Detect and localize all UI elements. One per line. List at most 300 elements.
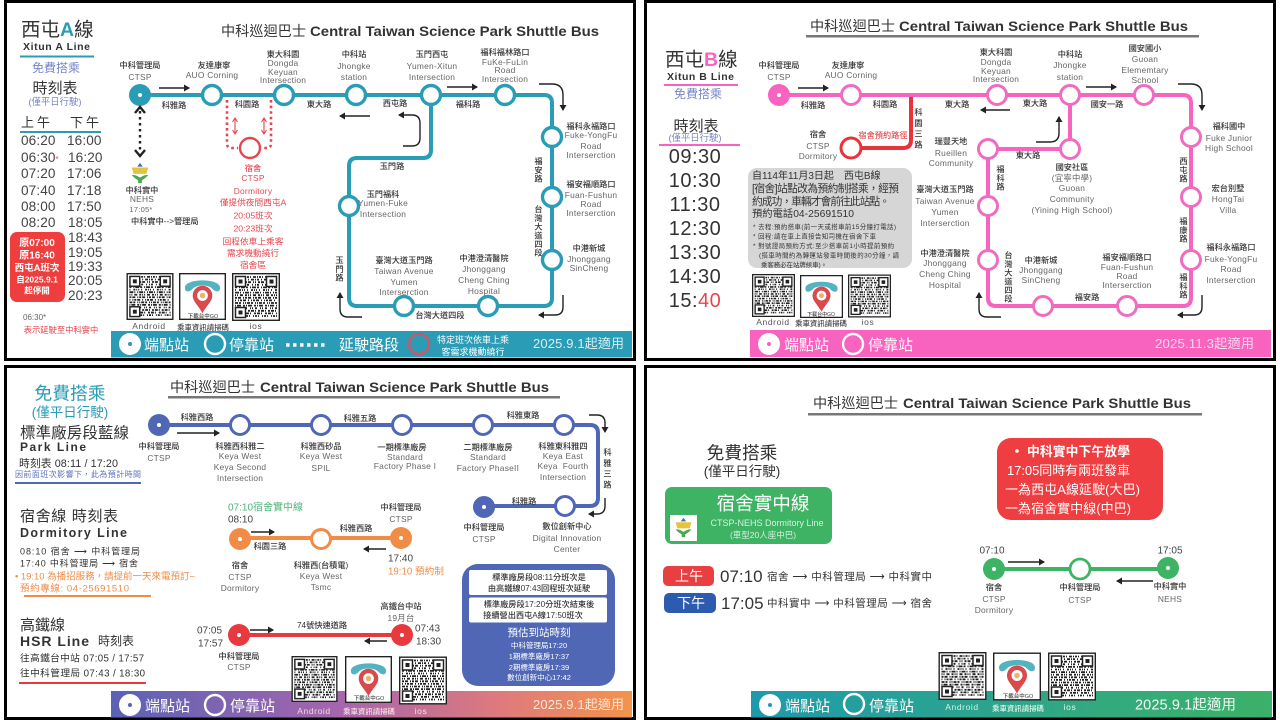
terminal and stops bbox=[202, 86, 562, 316]
free ride heading bbox=[704, 443, 780, 479]
station labels B: 臺灣大道玉門路 bbox=[916, 184, 974, 194]
station labels B: 福安福順路口 bbox=[1102, 252, 1152, 262]
timetable: 17:18 bbox=[67, 183, 102, 198]
QR codes A: Android bbox=[132, 321, 166, 331]
notice: discontinued runs: 原07:00 bbox=[19, 237, 55, 249]
QR codes B bbox=[753, 275, 890, 328]
station labels B: 東大科園 bbox=[980, 47, 1012, 57]
Park line labels: 科雅東科雅四 bbox=[538, 441, 588, 451]
route: HSR line: 18:30 bbox=[416, 636, 441, 648]
station labels A: 中科站 bbox=[342, 49, 366, 59]
Park line info: Park Line bbox=[20, 440, 86, 454]
timetable: 時刻表 bbox=[673, 118, 719, 135]
title bbox=[806, 18, 1199, 38]
route line B bbox=[768, 84, 1200, 316]
QR codes A: ios bbox=[250, 321, 262, 331]
road names B: 福安路 bbox=[1075, 292, 1100, 302]
free ride heading: 免費搭乘 bbox=[34, 384, 106, 404]
Park line labels: 數位創新中心 bbox=[542, 521, 592, 531]
station labels B: 宿舍預約路徑 bbox=[858, 130, 908, 140]
station labels B: 中港澄清醫院 bbox=[920, 248, 970, 258]
Park line labels: CTSP bbox=[472, 534, 496, 544]
panel: Dormitory NEHS line bbox=[646, 366, 1274, 718]
route: Park line bbox=[148, 414, 598, 518]
legend bar C: 端點站 bbox=[145, 698, 190, 715]
station labels B: Hospital bbox=[929, 280, 961, 290]
timetable: 09:30 bbox=[669, 146, 721, 168]
notice: discontinued runs: 起停開 bbox=[24, 286, 50, 296]
station labels B: Road bbox=[1116, 271, 1138, 281]
QR codes B: 下載台中GO bbox=[807, 311, 835, 318]
timetable: 06:20 bbox=[21, 133, 56, 148]
station labels B: Dongda bbox=[981, 57, 1012, 67]
station labels A: 福安福順路口 bbox=[566, 179, 616, 189]
station labels B: Jhonggang bbox=[1019, 265, 1063, 275]
QR codes B: ios bbox=[862, 317, 874, 327]
title: 中科巡迴巴士 bbox=[810, 18, 895, 34]
Park line labels: 科雅西科雅二 bbox=[215, 441, 265, 451]
route: HSR line: 07:05 bbox=[197, 626, 222, 636]
station labels A: Hospital bbox=[468, 286, 500, 296]
Park line labels: SPIL bbox=[311, 463, 331, 473]
timetable: 20:05 bbox=[68, 273, 103, 288]
station labels B: 友達康寧 bbox=[832, 60, 864, 70]
station labels B: Guoan bbox=[1059, 183, 1085, 193]
notice: reservation: 乘客務必在站牌候車)。 bbox=[761, 260, 827, 269]
legend bar A: 端點站 bbox=[144, 337, 189, 354]
station labels B: CTSP bbox=[806, 141, 830, 151]
Dormitory line info: 08:10 宿舍 ⟶ 中科管理局 bbox=[20, 546, 140, 556]
dormitory branch: Dormitory bbox=[234, 186, 273, 196]
legend bar B bbox=[750, 330, 1271, 357]
QR codes B: 乘車資訊請掃碼 bbox=[795, 319, 847, 328]
notice: reservation: * 去程:預約搭車(前一天或搭車前15分鐘打電話) bbox=[753, 222, 896, 231]
Park line info: 時刻表 08:11 / 17:20 bbox=[19, 456, 118, 470]
timetable: 06:30* bbox=[21, 150, 59, 165]
Park line labels: Center bbox=[554, 544, 580, 554]
HSR line info: 往中科管理局 07:43 / 18:30 bbox=[20, 666, 146, 680]
station labels A: Jhonggang bbox=[567, 254, 611, 264]
station labels B: station bbox=[1057, 72, 1083, 82]
callout: after-school departures: 17:05同時有兩班發車 bbox=[1007, 463, 1130, 478]
Park line labels: 科雅路 bbox=[512, 496, 537, 506]
road names A: 東大路 bbox=[307, 99, 332, 109]
QR codes C: Android bbox=[297, 706, 331, 716]
station labels A: 中港新城 bbox=[573, 243, 605, 253]
station labels B: Fuan-Fushun bbox=[1101, 262, 1153, 272]
Dormitory line info: 17:40 中科管理局 ⟶ 宿舍 bbox=[20, 558, 138, 568]
Park line labels: Intersection bbox=[540, 472, 586, 482]
route: HSR line: 19月台 bbox=[387, 613, 415, 623]
title: Central Taiwan Science Park Shuttle Bus bbox=[903, 395, 1191, 411]
callout: arrival times: 1期標準廠房17:37 bbox=[509, 651, 569, 661]
title: Central Taiwan Science Park Shuttle Bus bbox=[310, 23, 599, 39]
Park line labels: Keya West bbox=[219, 451, 262, 461]
station labels B: 國安社區 bbox=[1056, 162, 1088, 172]
station labels B: Dormitory bbox=[799, 151, 838, 161]
extension to NEHS: NEHS bbox=[130, 194, 154, 204]
station labels A: Interserction bbox=[379, 287, 429, 297]
station labels A: 中科管理局 bbox=[120, 60, 160, 70]
panel: Xitun B Line bbox=[646, 2, 1274, 360]
station labels B: Guoan bbox=[1132, 54, 1158, 64]
route: Dormitory line: 中科管理局 bbox=[381, 502, 421, 512]
route: Dormitory line: CTSP bbox=[228, 572, 252, 582]
road names A: 福安路 bbox=[534, 156, 543, 184]
road names B: 科園三路 bbox=[914, 107, 923, 151]
QR codes C: ios bbox=[415, 706, 427, 716]
station labels A: Fuan-Fushun bbox=[565, 190, 617, 200]
timetable: 下午 bbox=[70, 115, 102, 130]
timetable: 上午 bbox=[21, 115, 53, 130]
panel: Park, Dormitory and HSR lines bbox=[6, 366, 634, 718]
station labels B: Keyuan bbox=[981, 66, 1011, 76]
Park line labels: Keya Second bbox=[214, 462, 266, 472]
road names B: 西屯路 bbox=[1178, 157, 1188, 184]
free ride heading bbox=[32, 384, 108, 420]
legend bar D: 端點站 bbox=[785, 698, 830, 715]
station labels A: Yumen-Fuke bbox=[358, 198, 408, 208]
station labels A: Yumen bbox=[390, 277, 418, 287]
QR codes D: 下載台中GO bbox=[1003, 692, 1034, 700]
dormitory reservation branch bbox=[852, 97, 911, 148]
station labels B: Community bbox=[1050, 194, 1095, 204]
station labels A: Intersection bbox=[260, 75, 306, 85]
timetable: 14:30 bbox=[669, 266, 721, 288]
timetable: 19:33 bbox=[68, 259, 103, 274]
road names A: 玉門路 bbox=[380, 161, 405, 171]
title: Central Taiwan Science Park Shuttle Bus bbox=[260, 379, 549, 395]
schedule rows: 07:10 bbox=[720, 567, 763, 586]
notice: reservation: 約成功，車輛才會前往此站點。 bbox=[752, 195, 890, 208]
QR codes A bbox=[127, 274, 279, 332]
road names B bbox=[801, 98, 1188, 304]
legend bar A: 延駛路段 bbox=[339, 337, 399, 354]
legend bar B: 2025.11.3起適用 bbox=[1155, 335, 1254, 351]
station labels B: Yumen bbox=[931, 207, 959, 217]
Park line labels: 科雅西路 bbox=[181, 412, 214, 422]
QR codes A: 下載台中GO bbox=[188, 312, 219, 320]
route: Dormitory line bbox=[221, 500, 444, 593]
station labels A: 福科永福路口 bbox=[566, 121, 616, 131]
HSR line info: 往高鐵台中站 07:05 / 17:57 bbox=[20, 652, 144, 664]
Dormitory line info bbox=[15, 508, 195, 597]
route: NEHS line: 宿舍 bbox=[986, 582, 1002, 592]
station labels A: Intersection bbox=[482, 74, 528, 84]
route: HSR line: 74號快速道路 bbox=[297, 620, 348, 630]
route: Dormitory line: Tsmc bbox=[311, 582, 331, 592]
station labels B: 宿舍 bbox=[810, 129, 826, 139]
station labels B: Interserction bbox=[1102, 280, 1152, 290]
Park line labels: Digital Innovation bbox=[533, 533, 601, 543]
station labels A: Cheng Ching bbox=[458, 275, 510, 285]
dormitory branch: 僅提供夜間西屯A bbox=[220, 196, 287, 208]
notice: reservation: * 對號證局預約方式:至少搭車前1小時提前預約 bbox=[753, 241, 894, 250]
QR codes D: Android bbox=[945, 702, 979, 712]
station labels A: Jhongke bbox=[337, 61, 371, 71]
station labels B: Road bbox=[1220, 264, 1242, 274]
HSR line info: HSR Line bbox=[20, 633, 89, 649]
station labels B: 國安國小 bbox=[1129, 43, 1162, 53]
callout: arrival times: 預估到站時刻 bbox=[508, 626, 570, 639]
dormitory branch: CTSP bbox=[241, 173, 265, 183]
road names A: 科雅路 bbox=[162, 100, 187, 110]
road names B: 福康路 bbox=[1178, 216, 1188, 244]
timetable: 08:20 bbox=[21, 215, 56, 230]
notice: discontinued runs bbox=[10, 232, 65, 302]
callout: arrival times: 接續營出西屯A線17:50班次 bbox=[483, 610, 583, 620]
station labels B: Community bbox=[929, 158, 974, 168]
Park line labels: Keya Fourth bbox=[538, 461, 589, 471]
QR codes C: 下載台中GO bbox=[354, 694, 385, 702]
Dormitory line info: 宿舍線 時刻表 bbox=[20, 508, 118, 525]
timetable: 19:05 bbox=[68, 245, 103, 260]
station labels B: (Yining High School) bbox=[1031, 205, 1113, 215]
callout: arrival times: 由高鐵線07:43回程班次延駛 bbox=[488, 583, 590, 593]
road names A: 福科路 bbox=[456, 99, 481, 109]
Park line labels: 科雅三路 bbox=[602, 447, 612, 491]
station labels A: AUO Corning bbox=[186, 70, 238, 80]
schedule rows: 下午 bbox=[677, 595, 705, 611]
road names A: 台灣大道四段 bbox=[534, 204, 543, 258]
timetable: 08:00 bbox=[21, 199, 56, 214]
timetable: 16:00 bbox=[67, 133, 102, 148]
callout: after-school departures: 中科實中下午放學 bbox=[1027, 444, 1130, 459]
station labels A: Intersection bbox=[409, 72, 455, 82]
QR codes C: 乘車資訊請掃碼 bbox=[343, 707, 395, 716]
Park line info: 標準廠房段藍線 bbox=[20, 423, 129, 442]
notice: discontinued runs: 自2025.9.1 bbox=[16, 274, 58, 284]
free ride heading: (僅平日行駛) bbox=[704, 464, 780, 479]
road names B: 福科路 bbox=[1178, 272, 1188, 300]
timetable: 10:30 bbox=[669, 170, 721, 192]
route: NEHS line: CTSP bbox=[982, 594, 1006, 604]
panel: Xitun A Line bbox=[6, 2, 634, 360]
schedule rows: 中科實中 ⟶ 中科管理局 ⟶ 宿舍 bbox=[767, 596, 932, 610]
route: Dormitory line: 科園三路 bbox=[254, 541, 287, 551]
legend bar D bbox=[751, 691, 1272, 718]
legend bar A: 停靠站 bbox=[229, 337, 274, 354]
station labels A: FuKe-FuLin bbox=[482, 57, 528, 67]
station labels A: Road bbox=[580, 199, 602, 209]
line badge: CTSP-NEHS Dormitory Line bbox=[710, 518, 824, 528]
route: Dormitory line: 17:40 bbox=[388, 554, 413, 564]
station labels A: 中港澄清醫院 bbox=[459, 253, 509, 263]
station labels B: HongTai bbox=[1212, 194, 1244, 204]
road names A: 玉門路 bbox=[334, 256, 344, 283]
line heading: 免費搭乘 bbox=[674, 86, 722, 101]
callout: arrival times: 標準廠房段17:20分班次結束後 bbox=[484, 599, 594, 609]
line badge bbox=[665, 487, 832, 544]
Park line labels: 一期標準廠房 bbox=[377, 442, 427, 452]
callout: arrival times bbox=[462, 564, 615, 686]
station labels A: Yumen-Xitun bbox=[407, 61, 457, 71]
schedule rows bbox=[663, 566, 932, 613]
Park line labels: 科雅東路 bbox=[507, 410, 540, 420]
route: NEHS line: 中科實中 bbox=[1154, 581, 1186, 591]
HSR line info bbox=[19, 617, 146, 684]
route: Dormitory line: 19:10 預約制 bbox=[388, 564, 444, 578]
QR codes D: 乘車資訊請掃碼 bbox=[992, 704, 1044, 713]
direction arrows B bbox=[798, 84, 1202, 317]
station labels B: 宏台別墅 bbox=[1212, 183, 1244, 193]
Park line labels: 科雅五路 bbox=[344, 413, 377, 423]
Park line labels: Factory Phase I bbox=[374, 461, 436, 471]
road names B: 福科路 bbox=[996, 164, 1005, 192]
station labels B: AUO Corning bbox=[825, 70, 877, 80]
station labels B: Fuke Junior bbox=[1206, 133, 1252, 143]
route: HSR line: 07:43 bbox=[415, 624, 440, 634]
station labels A: 東大科園 bbox=[267, 49, 299, 59]
callout: after-school departures bbox=[997, 438, 1163, 520]
notice: discontinued runs: 西屯A班次 bbox=[15, 262, 60, 274]
callout: arrival times: 中科管理局17:20 bbox=[511, 640, 567, 650]
route: NEHS line: 07:10 bbox=[979, 546, 1005, 556]
station labels A: Intersection bbox=[360, 209, 406, 219]
route: NEHS line: CTSP bbox=[1068, 595, 1092, 605]
timetable: 13:30 bbox=[669, 242, 721, 264]
title: 中科巡迴巴士 bbox=[170, 379, 255, 395]
line heading: Xitun A Line bbox=[23, 41, 90, 53]
Park line labels: Factory PhaseII bbox=[457, 463, 519, 473]
station labels A: Road bbox=[494, 65, 516, 75]
QR codes C bbox=[292, 657, 446, 716]
road names B: 東大路 bbox=[1016, 150, 1041, 160]
station labels A: 福科福林路口 bbox=[480, 47, 530, 57]
road names A: 台灣大道四段 bbox=[415, 310, 465, 320]
route: HSR line bbox=[197, 601, 441, 672]
station labels A: Jhonggang bbox=[462, 264, 506, 274]
Park line labels: 中科管理局 bbox=[464, 522, 504, 532]
legend bar D: 2025.9.1起適用 bbox=[1135, 696, 1236, 714]
route: Dormitory line: Keya West bbox=[300, 571, 343, 581]
timetable: 15:40 bbox=[669, 290, 721, 312]
notice: reservation: 預約電話04-25691510 bbox=[752, 207, 854, 220]
route: Dormitory line: Dormitory bbox=[221, 583, 260, 593]
station labels B: 中科站 bbox=[1058, 49, 1082, 59]
road names B: 科園路 bbox=[873, 99, 898, 109]
route: Dormitory line: 07:10宿舍實中線 bbox=[228, 500, 303, 514]
line heading: 西屯A線 bbox=[21, 19, 94, 41]
station labels B: 中科管理局 bbox=[759, 60, 799, 70]
Park line labels: 二期標準廠房 bbox=[463, 442, 513, 452]
notice: reservation: (搭車時間約為轉運站發車時間後的30分鐘，請 bbox=[759, 250, 900, 260]
route: HSR line: CTSP bbox=[227, 662, 251, 672]
legend bar D: 停靠站 bbox=[869, 698, 914, 715]
Dormitory line info: • 19:10 為播招服務，請提前一天來電預訂~ bbox=[15, 570, 195, 582]
station labels A: Interserction bbox=[566, 208, 616, 218]
station labels B: Jhongke bbox=[1053, 60, 1087, 70]
HSR line info: 時刻表 bbox=[98, 634, 134, 648]
line heading bbox=[20, 19, 94, 75]
station labels B: Intersection bbox=[973, 74, 1019, 84]
route: HSR line: 中科管理局 bbox=[219, 651, 259, 661]
timetable: 11:30 bbox=[669, 194, 721, 216]
station labels A: Road bbox=[580, 141, 602, 151]
station labels A: Interserction bbox=[566, 150, 616, 160]
title: 中科巡迴巴士 bbox=[813, 395, 898, 411]
dormitory branch bbox=[220, 100, 287, 270]
station labels B: Rueillen bbox=[935, 148, 967, 158]
station labels A: SinCheng bbox=[570, 263, 608, 273]
line badge: 宿舍實中線 bbox=[717, 493, 809, 514]
title: 中科巡迴巴士 bbox=[221, 23, 306, 39]
icon: NEHS logo bbox=[132, 163, 148, 183]
QR codes A: 乘車資訊請掃碼 bbox=[177, 323, 229, 332]
schedule rows: 上午 bbox=[675, 568, 703, 584]
station labels B: (宜寧中學) bbox=[1052, 173, 1092, 183]
dormitory branch: 宿舍區 bbox=[240, 259, 266, 270]
road names A: 科園路 bbox=[235, 99, 260, 109]
station labels A: Keyuan bbox=[268, 67, 298, 77]
route: Dormitory line: 科雅西(台積電) bbox=[294, 560, 349, 570]
note: star runs bbox=[23, 313, 98, 335]
legend bar C: 2025.9.1起適用 bbox=[533, 697, 624, 712]
station labels B: School bbox=[1131, 75, 1159, 85]
station labels A: 玉門福科 bbox=[367, 189, 399, 199]
note: star runs: 06:30* bbox=[23, 313, 46, 322]
Park line info: 因前面班次影響下，此為預計時間 bbox=[15, 469, 141, 479]
route: Dormitory line: 科雅西路 bbox=[340, 523, 373, 533]
legend bar A bbox=[111, 331, 632, 358]
timetable: 16:20 bbox=[68, 150, 103, 165]
station labels B: 瑞豐天地 bbox=[935, 136, 967, 146]
timetable: 17:06 bbox=[67, 166, 102, 181]
timetable: (僅平日行駛) bbox=[28, 96, 82, 107]
icon: NEHS logo bbox=[676, 518, 691, 537]
station labels B: High School bbox=[1205, 143, 1253, 153]
timetable bbox=[20, 80, 103, 303]
route: NEHS line: NEHS bbox=[1158, 594, 1182, 604]
Park line labels bbox=[139, 410, 612, 554]
notice: reservation bbox=[748, 168, 912, 269]
Park line labels: Standard bbox=[387, 452, 423, 462]
station labels A: 玉門西屯 bbox=[416, 49, 448, 59]
notice: reservation: * 回程:請在車上直接告知司機在宿舍下車 bbox=[753, 232, 877, 240]
legend bar B: 停靠站 bbox=[868, 337, 913, 354]
road names B: 東大路 bbox=[1023, 98, 1048, 108]
legend bar A: 特定班次依車上乘 bbox=[437, 334, 509, 345]
station labels B: Fuke-YongFu bbox=[1205, 254, 1257, 264]
callout: arrival times: 標準廠房段08:11分班次是 bbox=[492, 572, 586, 582]
dormitory branch: 宿舍 bbox=[245, 163, 261, 173]
timetable: 20:23 bbox=[68, 288, 103, 303]
station labels B: Taiwan Avenue bbox=[915, 196, 975, 206]
station labels A: Fuke-YongFu bbox=[565, 130, 617, 140]
dormitory branch: 20:23班次 bbox=[233, 222, 273, 234]
station labels B: CTSP bbox=[767, 72, 791, 82]
route: NEHS line: 中科管理局 bbox=[1060, 582, 1100, 592]
HSR line info: 高鐵線 bbox=[20, 617, 65, 634]
callout: after-school departures: 一為西屯A線延駛(大巴) bbox=[1005, 482, 1140, 497]
dormitory branch: 回程依車上乘客 bbox=[223, 236, 284, 246]
road names B: 台灣大道四段 bbox=[1004, 250, 1013, 304]
title bbox=[168, 379, 560, 398]
station labels B: 中港新城 bbox=[1025, 255, 1057, 265]
Dormitory line info: Dormitory Line bbox=[20, 526, 127, 540]
station labels A bbox=[120, 47, 617, 297]
station labels A: Dongda bbox=[268, 58, 299, 68]
legend bar C: 停靠站 bbox=[230, 698, 275, 715]
route: NEHS line: Dormitory bbox=[975, 605, 1014, 615]
road names A bbox=[162, 98, 543, 320]
station labels B: SinCheng bbox=[1022, 275, 1060, 285]
timetable: 18:43 bbox=[68, 230, 103, 245]
Park line labels: Standard bbox=[470, 452, 506, 462]
Park line labels: Keya East bbox=[543, 451, 584, 461]
line heading: Xitun B Line bbox=[667, 71, 734, 83]
Park line labels: Keya West bbox=[300, 451, 343, 461]
